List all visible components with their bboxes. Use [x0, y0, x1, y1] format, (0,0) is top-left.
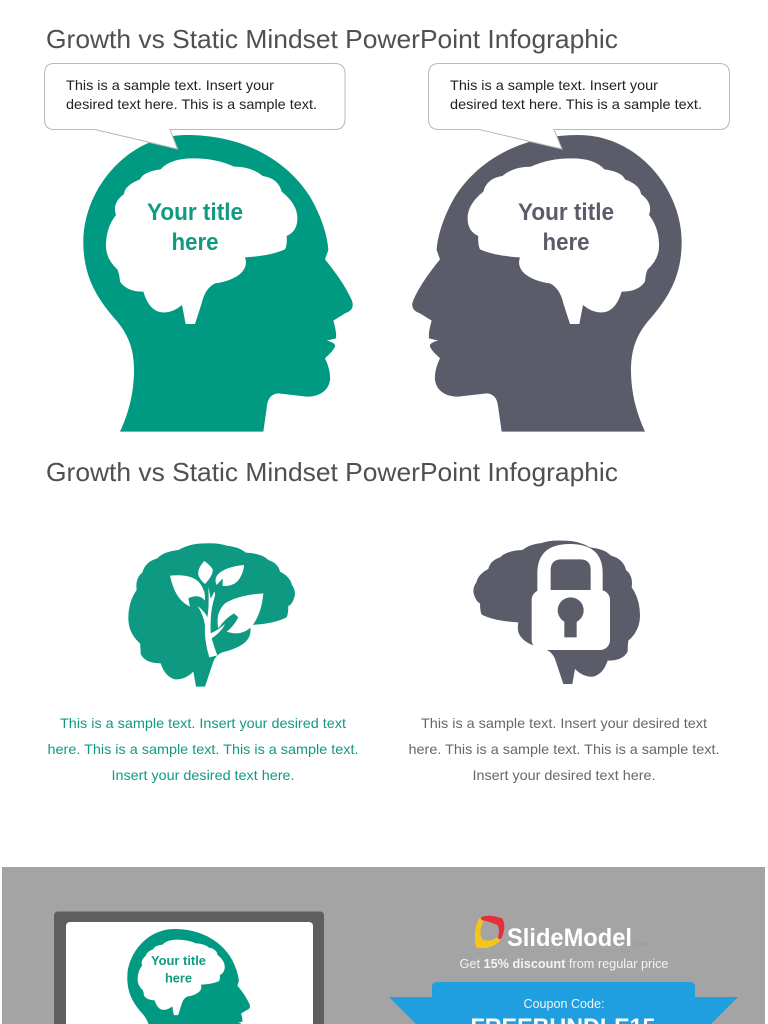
speech bubble text: growth: desired text here. This is a sample text.: [66, 96, 317, 112]
mini head label: Your title: [151, 954, 206, 968]
speech bubble text: static: [450, 77, 702, 112]
icon: brain with padlock: [473, 541, 640, 684]
brain label: growth: here: [172, 229, 218, 256]
brain label: static: [518, 199, 614, 256]
logo: SlideModel: [475, 916, 648, 952]
brain label: static: here: [542, 229, 590, 256]
text block: growth description: here. This is a sample text. This is a sample text.: [48, 741, 358, 757]
brain label: static: Your title: [518, 199, 614, 226]
discount text: Get 15% discount from regular price: [460, 956, 668, 971]
logo: SlideModel: SlideModel: [507, 924, 632, 952]
icon: brain with growing plant: [128, 543, 295, 687]
text block: growth description: This is a sample text. Insert your desired text: [60, 715, 346, 731]
brain label: growth: Your title: [147, 199, 243, 226]
coupon ribbon: [389, 982, 738, 1024]
speech bubble text: static: desired text here. This is a sample text.: [450, 96, 702, 112]
title: second slide: Growth vs Static Mindset PowerPoint Infographic: [46, 457, 618, 487]
panel: static head: [412, 64, 730, 432]
mini head label: here: [165, 972, 192, 986]
speech bubble: growth: [44, 64, 345, 149]
coupon label: Coupon Code:: [524, 996, 604, 1011]
text block: growth description: [48, 715, 358, 783]
brain label: growth: [147, 199, 243, 256]
title: first slide: Growth vs Static Mindset PowerPoint Infographic: [46, 24, 618, 54]
mini head label: [151, 954, 206, 986]
text block: static description: Insert your desired text here.: [472, 767, 656, 783]
panel: promo banner: [2, 867, 765, 1024]
text block: growth description: Insert your desired text here.: [112, 767, 294, 783]
logo: SlideModel: .com: [633, 941, 648, 948]
head silhouette: static: [412, 135, 682, 432]
speech bubble text: static: This is a sample text. Insert your: [450, 77, 658, 93]
text block: static description: here. This is a sample text. This is a sample text.: [408, 741, 720, 757]
text block: static description: This is a sample text. Insert your desired text: [421, 715, 707, 731]
speech bubble: static: [428, 64, 730, 149]
speech bubble text: growth: [66, 77, 317, 112]
panel: growth head: [44, 64, 353, 432]
head silhouette: growth: [83, 135, 353, 432]
speech bubble text: growth: This is a sample text. Insert your: [66, 77, 274, 93]
mini head: [127, 929, 250, 1024]
text block: static description: [408, 715, 720, 783]
laptop mockup: [54, 912, 324, 1024]
